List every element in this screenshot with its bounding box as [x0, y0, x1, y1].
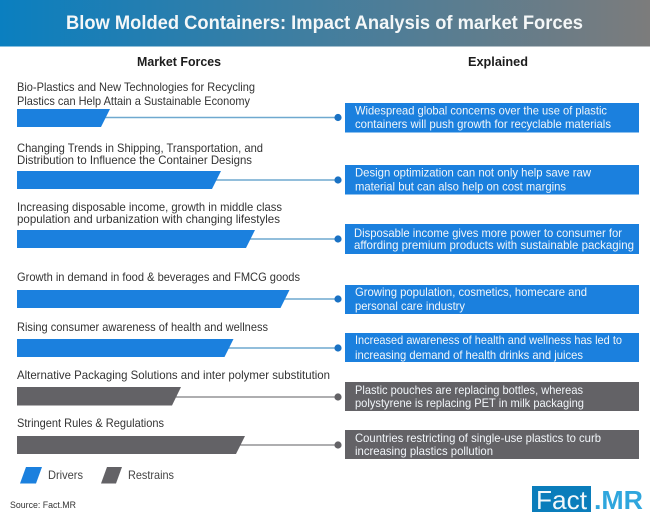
row 3: Disposable income driver: population and urbanization with changing lifestyles	[17, 213, 280, 226]
row 6: Alternative packaging restraint: Plastic pouches are replacing bottles, whereas	[355, 384, 583, 397]
row 2: Shipping trends driver: Distribution to Influence the Container Designs	[17, 154, 252, 167]
title banner: Blow Molded Containers: Impact Analysis of market Forces	[66, 12, 583, 34]
legend: Drivers	[48, 468, 83, 482]
row 4: Food and beverages driver: personal care industry	[355, 300, 465, 313]
title banner	[0, 0, 650, 46]
row 7: Rules and regulations restraint	[17, 417, 639, 459]
row 1: Bio-Plastics driver	[17, 81, 639, 132]
row 1: Bio-Plastics driver: Widespread global concerns over the use of plastic	[355, 104, 607, 118]
heading: Market Forces: Market Forces	[137, 54, 221, 69]
row 5: Health awareness driver: Rising consumer awareness of health and wellness	[17, 321, 268, 334]
logo: Fact.MR: .MR	[594, 485, 643, 515]
row 4: Food and beverages driver: Growing population, cosmetics, homecare and	[355, 286, 587, 299]
row 5: Health awareness driver: increasing demand of health drinks and juices	[355, 349, 583, 362]
row 2: Shipping trends driver: Changing Trends in Shipping, Transportation, and	[17, 142, 263, 155]
row 7: Rules and regulations restraint: Countries restricting of single-use plastics to curb	[355, 432, 601, 445]
row 1: Bio-Plastics driver: Bio-Plastics and New Technologies for Recycling	[17, 81, 255, 94]
row 5: Health awareness driver: Increased awareness of health and wellness has led to	[355, 334, 622, 347]
row 6: Alternative packaging restraint	[17, 369, 639, 411]
legend	[20, 467, 174, 484]
row 3: Disposable income driver: Disposable income gives more power to consumer for	[354, 227, 622, 240]
row 4: Food and beverages driver	[17, 271, 639, 314]
row 6: Alternative packaging restraint: Alternative Packaging Solutions and inter polymer substitution	[17, 369, 330, 382]
row 2: Shipping trends driver: material but can also help on cost margins	[355, 181, 566, 194]
heading: Explained: Explained	[468, 54, 528, 69]
row 3: Disposable income driver	[17, 201, 639, 254]
row 7: Rules and regulations restraint: increasing plastics pollution	[355, 445, 493, 458]
row 4: Food and beverages driver: Growth in demand in food & beverages and FMCG goods	[17, 271, 300, 284]
row 3: Disposable income driver: Increasing disposable income, growth in middle class	[17, 201, 282, 214]
row 1: Bio-Plastics driver: Plastics can Help Attain a Sustainable Economy	[17, 95, 250, 108]
row 6: Alternative packaging restraint: polystyrene is replacing PET in milk packaging	[355, 397, 584, 410]
logo: Fact.MR: Fact	[536, 485, 588, 515]
legend: Restrains	[128, 468, 174, 482]
logo: Fact.MR	[532, 485, 643, 515]
source note: Source: Fact.MR	[10, 500, 76, 511]
row 2: Shipping trends driver	[17, 142, 639, 194]
row 3: Disposable income driver: affording premium products with sustainable packaging	[354, 239, 634, 252]
row 5: Health awareness driver	[17, 321, 639, 362]
row 2: Shipping trends driver: Design optimization can not only help save raw	[355, 167, 592, 180]
row 1: Bio-Plastics driver: containers will push growth for recyclable materials	[355, 118, 611, 131]
row 7: Rules and regulations restraint: Stringent Rules & Regulations	[17, 417, 164, 430]
